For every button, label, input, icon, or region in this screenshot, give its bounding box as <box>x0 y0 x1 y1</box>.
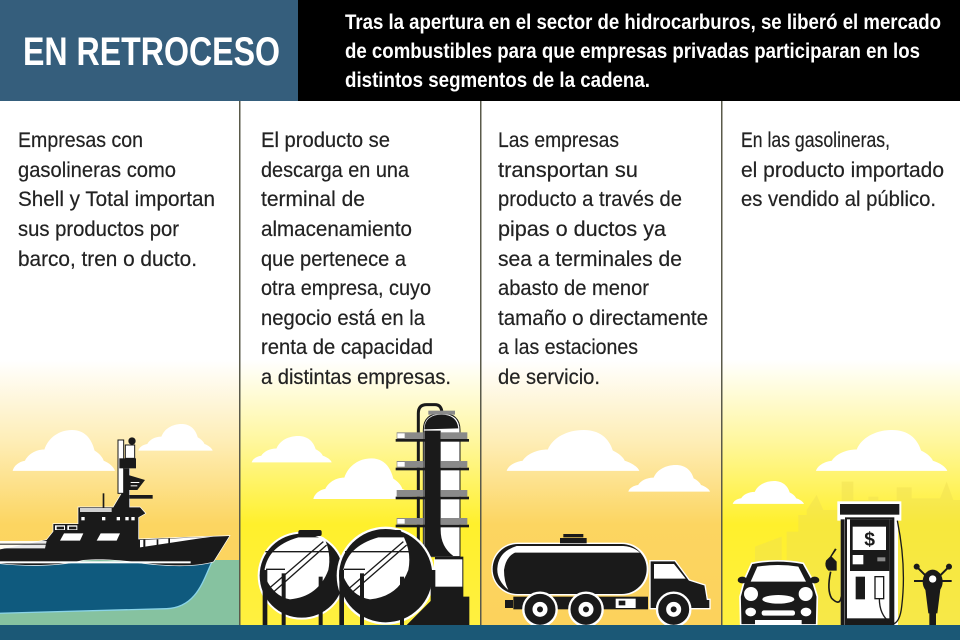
bottom band <box>0 625 960 640</box>
icon: sphere tank left <box>258 530 346 625</box>
title banner: EN RETROCESO <box>23 30 280 74</box>
text: truck step: producto a través de <box>498 187 682 211</box>
icon: gas station scene <box>733 430 960 625</box>
icon: tanker truck <box>491 430 710 626</box>
text: storage step: terminal de <box>261 187 365 211</box>
text: truck step: a las estaciones <box>498 335 638 359</box>
icon: motorcycle <box>914 564 952 625</box>
panel: tanker truck <box>481 128 722 626</box>
icon: ship <box>0 424 240 625</box>
text: storage step: descarga en una <box>261 158 409 182</box>
intro text banner <box>298 0 960 101</box>
text: truck step: Las empresas <box>498 128 619 152</box>
text: truck step: pipas o ductos ya <box>498 217 666 241</box>
icon: sphere tank right <box>337 527 435 625</box>
icon: car <box>738 561 819 625</box>
text: truck step: sea a terminales de <box>498 247 682 271</box>
text: storage step: El producto se <box>261 128 390 152</box>
text: storage step: negocio está en la <box>261 306 425 330</box>
text: ship step: barco, tren o ducto. <box>18 247 197 271</box>
icon: refinery and tanks <box>252 405 469 625</box>
panel: storage terminal <box>240 128 481 625</box>
panel: gas station <box>722 128 960 625</box>
text: storage step: que pertenece a <box>261 247 406 271</box>
text: gas station step <box>741 128 944 211</box>
text: ship step <box>18 128 215 271</box>
text: truck step <box>498 128 708 389</box>
text: ship step: gasolineras como <box>18 158 176 182</box>
text: gas station step: es vendido al público. <box>741 187 936 211</box>
text: storage step: a distintas empresas. <box>261 365 451 389</box>
column dividers <box>239 101 722 625</box>
text: storage step: renta de capacidad <box>261 335 433 359</box>
icon: fuel pump <box>825 501 903 625</box>
text: ship step: sus productos por <box>18 217 179 241</box>
intro text banner: distintos segmentos de la cadena. <box>345 68 650 92</box>
panel: ship <box>0 128 240 625</box>
text: storage step <box>261 128 451 389</box>
text: gas station step: el producto importado <box>741 158 944 182</box>
text: storage step: almacenamiento <box>261 217 412 241</box>
text: storage step: otra empresa, cuyo <box>261 276 431 300</box>
text: truck step: de servicio. <box>498 365 600 389</box>
text: gas station step: En las gasolineras, <box>741 128 890 152</box>
text: truck step: tamaño o directamente <box>498 306 708 330</box>
title banner <box>0 0 298 101</box>
text: truck step: abasto de menor <box>498 276 649 300</box>
text: truck step: transportan su <box>498 158 638 182</box>
text: ship step: Shell y Total importan <box>18 187 215 211</box>
icon: fuel pump: $ <box>864 529 875 550</box>
text: ship step: Empresas con <box>18 128 143 152</box>
